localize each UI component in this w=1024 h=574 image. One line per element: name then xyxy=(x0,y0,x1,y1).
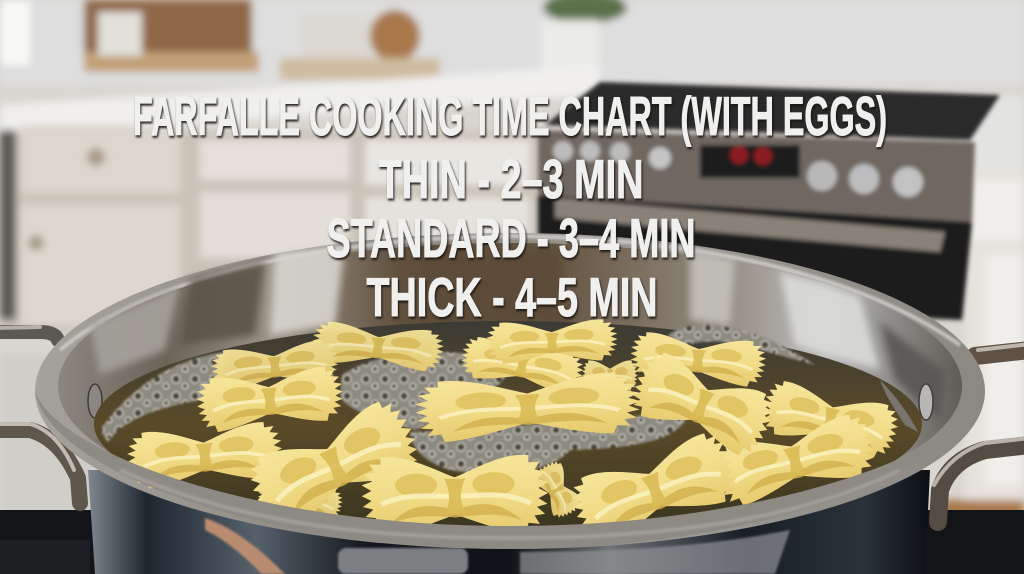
standard cooking time: STANDARD - 3–4 MIN xyxy=(326,207,696,269)
rim shine xyxy=(120,470,900,538)
pasta: farfalle xyxy=(125,319,902,551)
pot front rim band xyxy=(35,392,985,549)
rivets xyxy=(88,384,933,420)
cooktop base xyxy=(0,510,1024,574)
thin cooking time: THIN - 2–3 MIN xyxy=(378,148,644,210)
water surface xyxy=(94,321,922,527)
pot body xyxy=(88,470,930,574)
stove xyxy=(538,82,1000,320)
pot front handle rivets and brackets xyxy=(205,518,790,574)
foam clusters xyxy=(100,325,918,474)
left handles xyxy=(0,327,80,503)
pot interior wall xyxy=(58,243,962,529)
rim highlight xyxy=(60,236,960,350)
thick cooking time: THICK - 4–5 MIN xyxy=(366,266,658,328)
pot rim xyxy=(35,233,985,549)
right handles xyxy=(934,344,1024,522)
farfalle back row xyxy=(210,320,638,523)
